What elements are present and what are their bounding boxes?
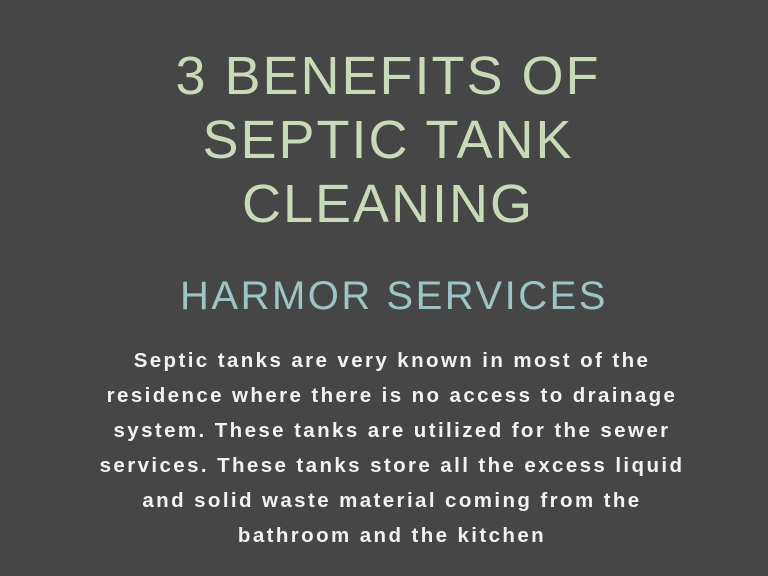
- body text: system. These tanks are utilized for the sewer: [113, 419, 670, 442]
- body text: and solid waste material coming from the: [142, 489, 642, 512]
- title: CLEANING: [242, 174, 534, 234]
- title: SEPTIC TANK: [202, 110, 574, 170]
- subtitle: HARMOR SERVICES: [180, 274, 608, 318]
- body text: residence where there is no access to drainage: [107, 384, 677, 407]
- body text: Septic tanks are very known in most of the: [134, 349, 650, 372]
- title: [175, 46, 601, 234]
- title: 3 BENEFITS OF: [175, 46, 601, 106]
- body text: services. These tanks store all the excess liquid: [100, 454, 684, 477]
- body text: [100, 349, 684, 547]
- body text: bathroom and the kitchen: [238, 524, 546, 547]
